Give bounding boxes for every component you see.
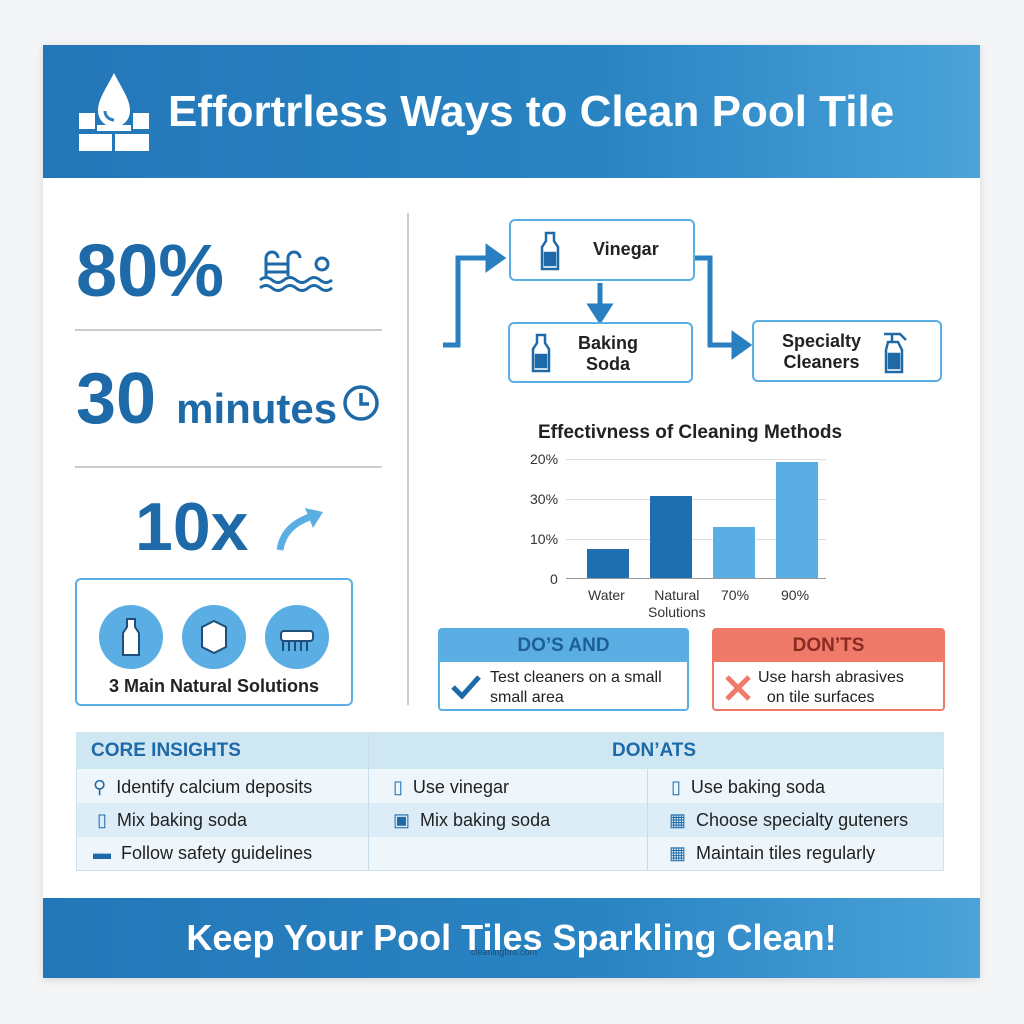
flow: baking soda (508, 322, 693, 383)
footer banner: cleaningbro.com (471, 947, 537, 957)
panel: don'ts: DON’TS (793, 635, 864, 656)
table: core insights: DON’ATS (612, 740, 696, 761)
table: core insights: ▯ (393, 776, 403, 796)
icon: clock (343, 385, 379, 421)
bar chart: Water (588, 587, 625, 603)
stat: 80% (76, 229, 333, 312)
table: core insights: ▯ (671, 776, 681, 796)
stat: 80%: 80% (76, 229, 224, 312)
table: core insights: ▦ (669, 842, 686, 862)
table: core insights: ▣ (393, 810, 410, 830)
bar chart: 30% (530, 491, 558, 507)
table: core insights: Mix baking soda (117, 810, 247, 830)
panel: do's: Test cleaners on a small (490, 669, 662, 686)
icon: bottle (99, 605, 163, 669)
icon: box (182, 605, 246, 669)
flow: specialty cleaners: Cleaners (784, 352, 860, 372)
icon: drop on bricks (79, 73, 149, 151)
bar chart: 70% (721, 587, 749, 603)
footer banner (43, 898, 980, 978)
panel: don'ts (712, 628, 945, 711)
title: Effortrless Ways to Clean Pool Tile (168, 87, 894, 136)
panel: don'ts: on tile surfaces (767, 689, 874, 706)
stat: 30 minutes: 30 minutes (76, 359, 337, 439)
panel: do's: DO’S AND (517, 635, 610, 656)
bar chart (530, 422, 842, 620)
table: core insights (76, 732, 944, 871)
table: core insights: CORE INSIGHTS (91, 740, 241, 761)
bar chart: 90% (781, 587, 809, 603)
table: core insights: Mix baking soda (420, 810, 550, 830)
table: core insights: Use baking soda (691, 776, 825, 796)
panel: 3 main natural solutions (75, 578, 353, 706)
table: core insights: ⚲ (93, 776, 106, 796)
bar chart: 10% (530, 531, 558, 547)
table: core insights: Follow safety guidelines (121, 842, 312, 862)
bar chart: Effectivness of Cleaning Methods (538, 422, 842, 443)
flow: specialty cleaners (752, 320, 942, 382)
panel: do's: small area (490, 689, 564, 706)
table: core insights: Use vinegar (413, 776, 509, 796)
header (43, 45, 980, 178)
icon: arrow up (276, 508, 323, 550)
bar chart: Solutions (648, 604, 706, 620)
footer banner: Keep Your Pool Tiles Sparkling Clean! (186, 917, 837, 958)
panel: do's (438, 628, 689, 711)
table: core insights: ▯ (97, 810, 107, 830)
flow: baking soda: Soda (586, 354, 630, 374)
bar chart: 20% (530, 451, 558, 467)
flow: baking soda: Baking (578, 333, 638, 353)
icon: brush (265, 605, 329, 669)
label: 3 Main Natural Solutions (109, 676, 319, 696)
icon: pool (259, 250, 333, 292)
flow: specialty cleaners: Specialty (782, 331, 861, 351)
flow: vinegar (509, 219, 695, 281)
flow arrows (443, 243, 752, 360)
table: core insights: ▬ (93, 842, 111, 862)
table: core insights: Identify calcium deposits (116, 776, 312, 796)
table: core insights: ▦ (669, 810, 686, 830)
table: core insights: Choose specialty guteners (696, 810, 908, 830)
bar chart: 0 (550, 571, 558, 587)
table: core insights: Maintain tiles regularly (696, 842, 875, 862)
stat: 10x: 10x (135, 489, 248, 565)
bar chart: Natural (654, 587, 699, 603)
flow: vinegar: Vinegar (593, 239, 659, 259)
panel: don'ts: Use harsh abrasives (758, 669, 904, 686)
